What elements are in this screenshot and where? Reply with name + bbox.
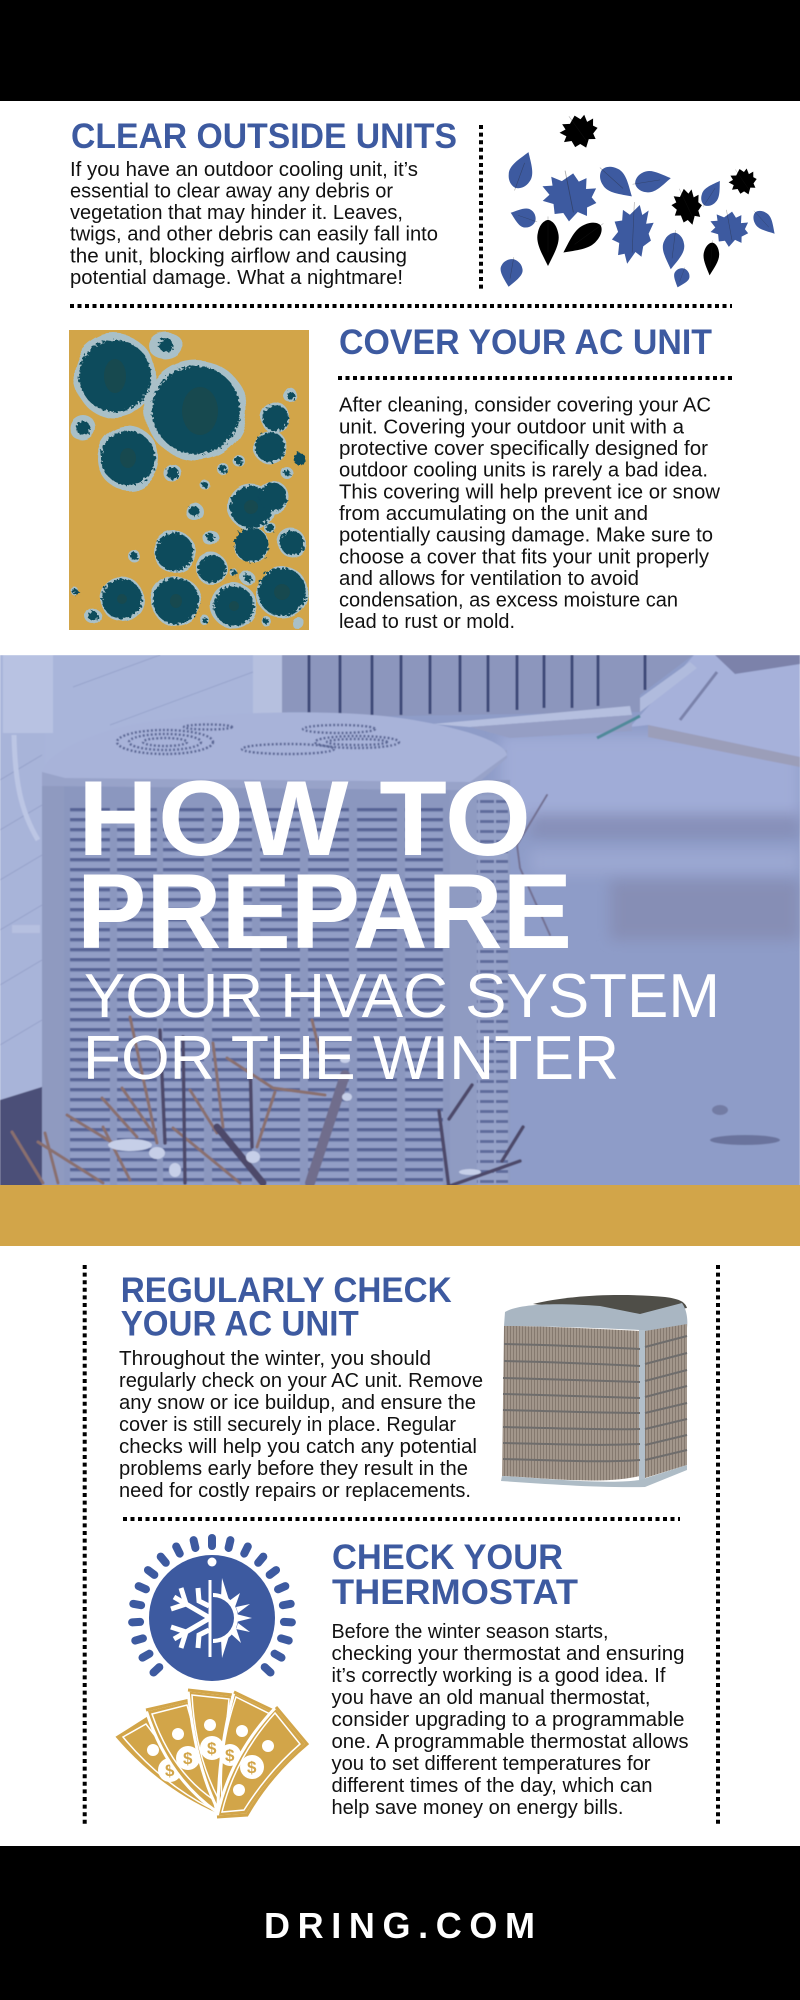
top black band <box>0 0 800 101</box>
heading: regularly check: REGULARLY CHECK <box>121 1271 452 1310</box>
text block: cover your AC unit: This covering will help prevent ice or snow <box>339 481 721 503</box>
text block: check your thermostat: Before the winter season starts, <box>332 1621 608 1643</box>
text block: check your thermostat <box>332 1621 688 1819</box>
text block: clear outside units: the unit, blocking airflow and causing <box>70 245 407 267</box>
house wall and trim <box>0 655 253 775</box>
icon: fan of money bills: $ <box>207 1739 217 1758</box>
text block: clear outside units: If you have an outdoor cooling unit, it’s <box>70 159 418 181</box>
text block: cover your AC unit: from accumulating on the unit and <box>339 503 648 525</box>
fence <box>282 655 693 718</box>
heading: cover your AC unit: COVER YOUR AC UNIT <box>339 323 712 362</box>
title: YOUR HVAC SYSTEM <box>84 962 720 1031</box>
sun half <box>213 1578 252 1658</box>
text block: clear outside units: potential damage. What a nightmare! <box>70 267 403 289</box>
heading: check your thermostat: CHECK YOUR <box>332 1538 563 1577</box>
heading: check your thermostat <box>332 1538 578 1612</box>
text block: check your thermostat: different times of the day, which can <box>332 1775 652 1797</box>
heading: regularly check: YOUR AC UNIT <box>121 1305 359 1344</box>
text block: cover your AC unit: outdoor cooling units is rarely a bad idea. <box>339 460 708 482</box>
text block: check your thermostat: you have an old manual thermostat, <box>332 1687 650 1709</box>
image: mold on gold background <box>69 330 309 630</box>
text block: clear outside units: essential to clear away any debris or <box>70 180 393 202</box>
panel: cover your AC unit <box>69 323 735 633</box>
text block: check your thermostat: it’s correctly working is a good idea. If <box>332 1665 666 1687</box>
text block: cover your AC unit: choose a cover that fits your unit properly <box>339 546 709 568</box>
icon: fan of money bills: $ <box>165 1761 175 1780</box>
panel: lower section with dotted side rules <box>85 1265 718 1826</box>
icon: fan of money bills: $ <box>183 1749 193 1768</box>
bare branches <box>12 795 550 1188</box>
text block: check your thermostat: checking your thermostat and ensuring <box>332 1643 684 1665</box>
unit body <box>42 780 510 1188</box>
text block: regularly check: Throughout the winter, you should <box>119 1348 431 1370</box>
icon: AC unit <box>501 1295 687 1487</box>
text block: regularly check: cover is still securely in place. Regular <box>119 1414 456 1436</box>
text block: cover your AC unit: condensation, as excess moisture can <box>339 590 678 612</box>
text block: regularly check: regularly check on your AC unit. Remove <box>119 1370 483 1392</box>
text block: check your thermostat: help save money on energy bills. <box>332 1797 624 1819</box>
icon: fan of money bills <box>117 1690 307 1817</box>
text block: regularly check: problems early before they result in the <box>119 1458 468 1480</box>
icon: fan of money bills: $ <box>225 1746 235 1765</box>
icon: thermostat dial with snowflake and sun <box>128 1534 296 1681</box>
text block: check your thermostat: one. A programmable thermostat allows <box>332 1731 688 1753</box>
text block: cover your AC unit: unit. Covering your outdoor unit with a <box>339 416 685 438</box>
text block: regularly check <box>119 1348 483 1502</box>
title <box>77 758 720 1093</box>
icon: scattered leaves <box>498 110 781 290</box>
fan grills <box>117 724 399 754</box>
text block: cover your AC unit: and allows for ventilation to avoid <box>339 568 639 590</box>
text block: cover your AC unit: After cleaning, consider covering your AC <box>339 395 711 417</box>
title: PREPARE <box>77 851 572 971</box>
heading: clear outside units: CLEAR OUTSIDE UNITS <box>71 117 457 156</box>
text block: regularly check: any snow or ice buildup, and ensure the <box>119 1392 476 1414</box>
text block: clear outside units: twigs, and other debris can easily fall into <box>70 224 438 246</box>
snow cap on unit <box>42 750 507 790</box>
text block: cover your AC unit <box>339 395 721 633</box>
text block: clear outside units <box>70 159 438 289</box>
title: HOW TO <box>78 758 531 878</box>
hero panel: snowy AC unit photo with title <box>0 655 800 1188</box>
title: FOR THE WINTER <box>83 1024 619 1093</box>
snowflake half <box>171 1580 210 1657</box>
text block: regularly check: checks will help you catch any potential <box>119 1436 477 1458</box>
footer band with site name <box>0 1846 800 2000</box>
text block: cover your AC unit: lead to rust or mold. <box>339 611 515 633</box>
gold band <box>0 1185 800 1246</box>
heading: check your thermostat: THERMOSTAT <box>332 1573 578 1612</box>
heading: regularly check <box>121 1271 452 1344</box>
text block: check your thermostat: consider upgrading to a programmable <box>332 1709 684 1731</box>
panel: clear outside units <box>70 110 781 290</box>
photo: snow-covered outdoor AC unit <box>0 655 800 1188</box>
text block: check your thermostat: you to set different temperatures for <box>332 1753 651 1775</box>
bank of snow and board <box>630 655 800 757</box>
text block: cover your AC unit: potentially causing damage. Make sure to <box>339 525 713 547</box>
text block: regularly check: need for costly repairs or replacements. <box>119 1480 471 1502</box>
concrete footing and hose <box>433 706 632 727</box>
footer band with site name: DRING.COM <box>264 1905 535 1946</box>
text block: cover your AC unit: protective cover specifically designed for <box>339 438 708 460</box>
icon: fan of money bills: $ <box>247 1758 257 1777</box>
text block: clear outside units: vegetation that may hinder it. Leaves, <box>70 202 403 224</box>
